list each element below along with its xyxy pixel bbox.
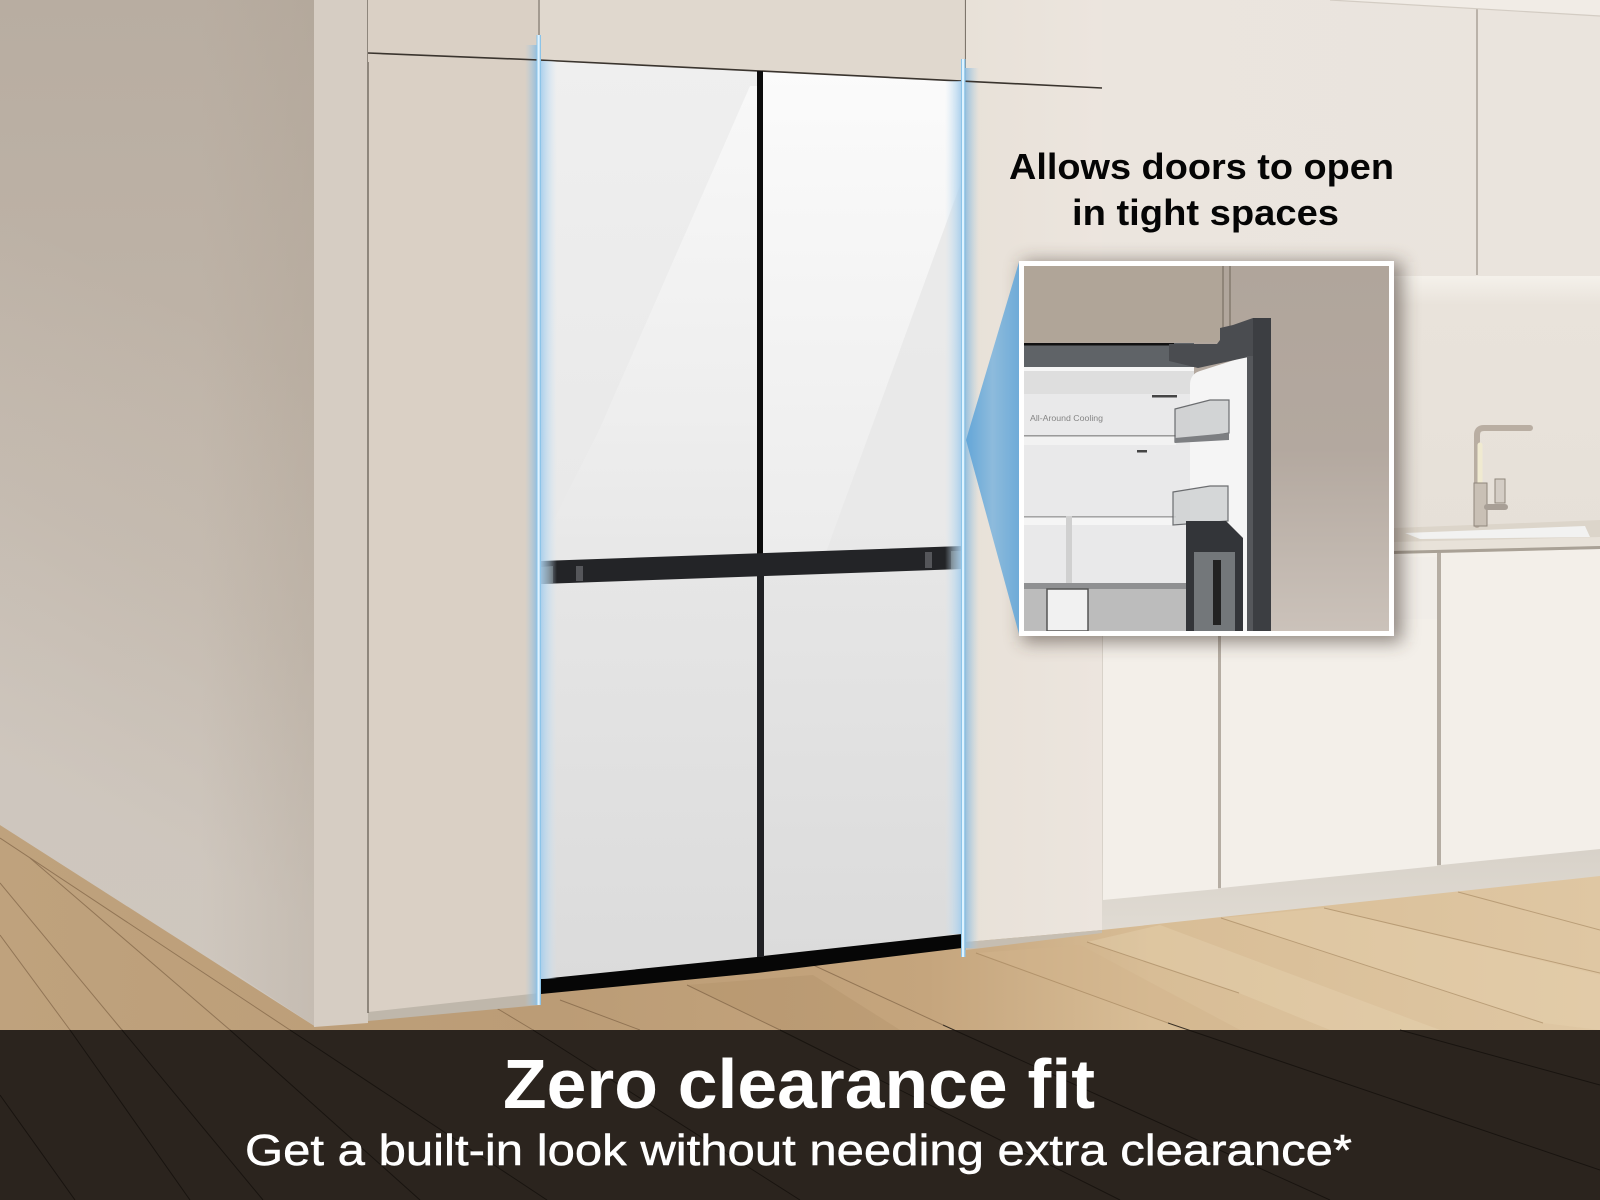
inset frame	[1019, 261, 1394, 636]
corner post	[314, 0, 368, 1027]
inset cabinet	[1222, 266, 1231, 328]
main title: Zero clearance fit	[503, 1045, 1095, 1123]
faucet	[1474, 428, 1530, 526]
inset wall	[1024, 266, 1389, 631]
outer glow right	[965, 68, 979, 948]
refrigerator	[368, 35, 1102, 1005]
countertop and sink	[1394, 520, 1600, 554]
floor gap under fridge	[541, 932, 962, 994]
fridge top edge	[539, 60, 1102, 88]
lower left door	[541, 565, 757, 979]
door inner liner	[1190, 356, 1247, 631]
dark door edge	[1247, 318, 1271, 631]
door hinge	[1169, 318, 1253, 368]
center gap	[757, 71, 764, 957]
tall cabinet right of fridge	[966, 0, 1102, 950]
fridge interior	[1024, 343, 1194, 631]
upper right door	[763, 71, 962, 558]
inset photo of open door	[1019, 261, 1394, 636]
band wood lines	[0, 1023, 1600, 1200]
callout heading: in tight spaces	[1072, 192, 1339, 233]
lower right door	[763, 560, 962, 956]
blue clearance line right	[961, 59, 966, 957]
cabinet seam left	[368, 53, 539, 60]
upper door bin	[1175, 400, 1229, 443]
handle bar	[541, 546, 962, 584]
outer glow left	[525, 45, 537, 1005]
base cabinets	[1102, 540, 1600, 930]
inner glow right	[945, 81, 961, 934]
blue arrow pointer	[966, 262, 1019, 634]
left wall	[0, 0, 316, 1027]
upper left door	[541, 61, 757, 566]
band background	[0, 1030, 1600, 1200]
inner glow left	[541, 61, 557, 979]
subtitle: Get a built-in look without needing extra clearance*	[245, 1126, 1352, 1175]
right side wall backsplash	[1100, 270, 1600, 560]
blue clearance line left	[536, 35, 541, 1005]
inset shadow	[1022, 262, 1402, 642]
bottom caption band	[0, 1023, 1600, 1200]
dispenser	[1186, 521, 1243, 631]
interior label: All-Around Cooling	[1030, 413, 1103, 423]
lower door bin	[1173, 486, 1228, 525]
upper wall cabinets	[1100, 0, 1600, 276]
callout heading: Allows doors to open	[1009, 146, 1394, 187]
wood floor	[0, 820, 1600, 1200]
tall cabinet left of fridge	[368, 0, 540, 1021]
cabinet above fridge	[368, 0, 966, 82]
